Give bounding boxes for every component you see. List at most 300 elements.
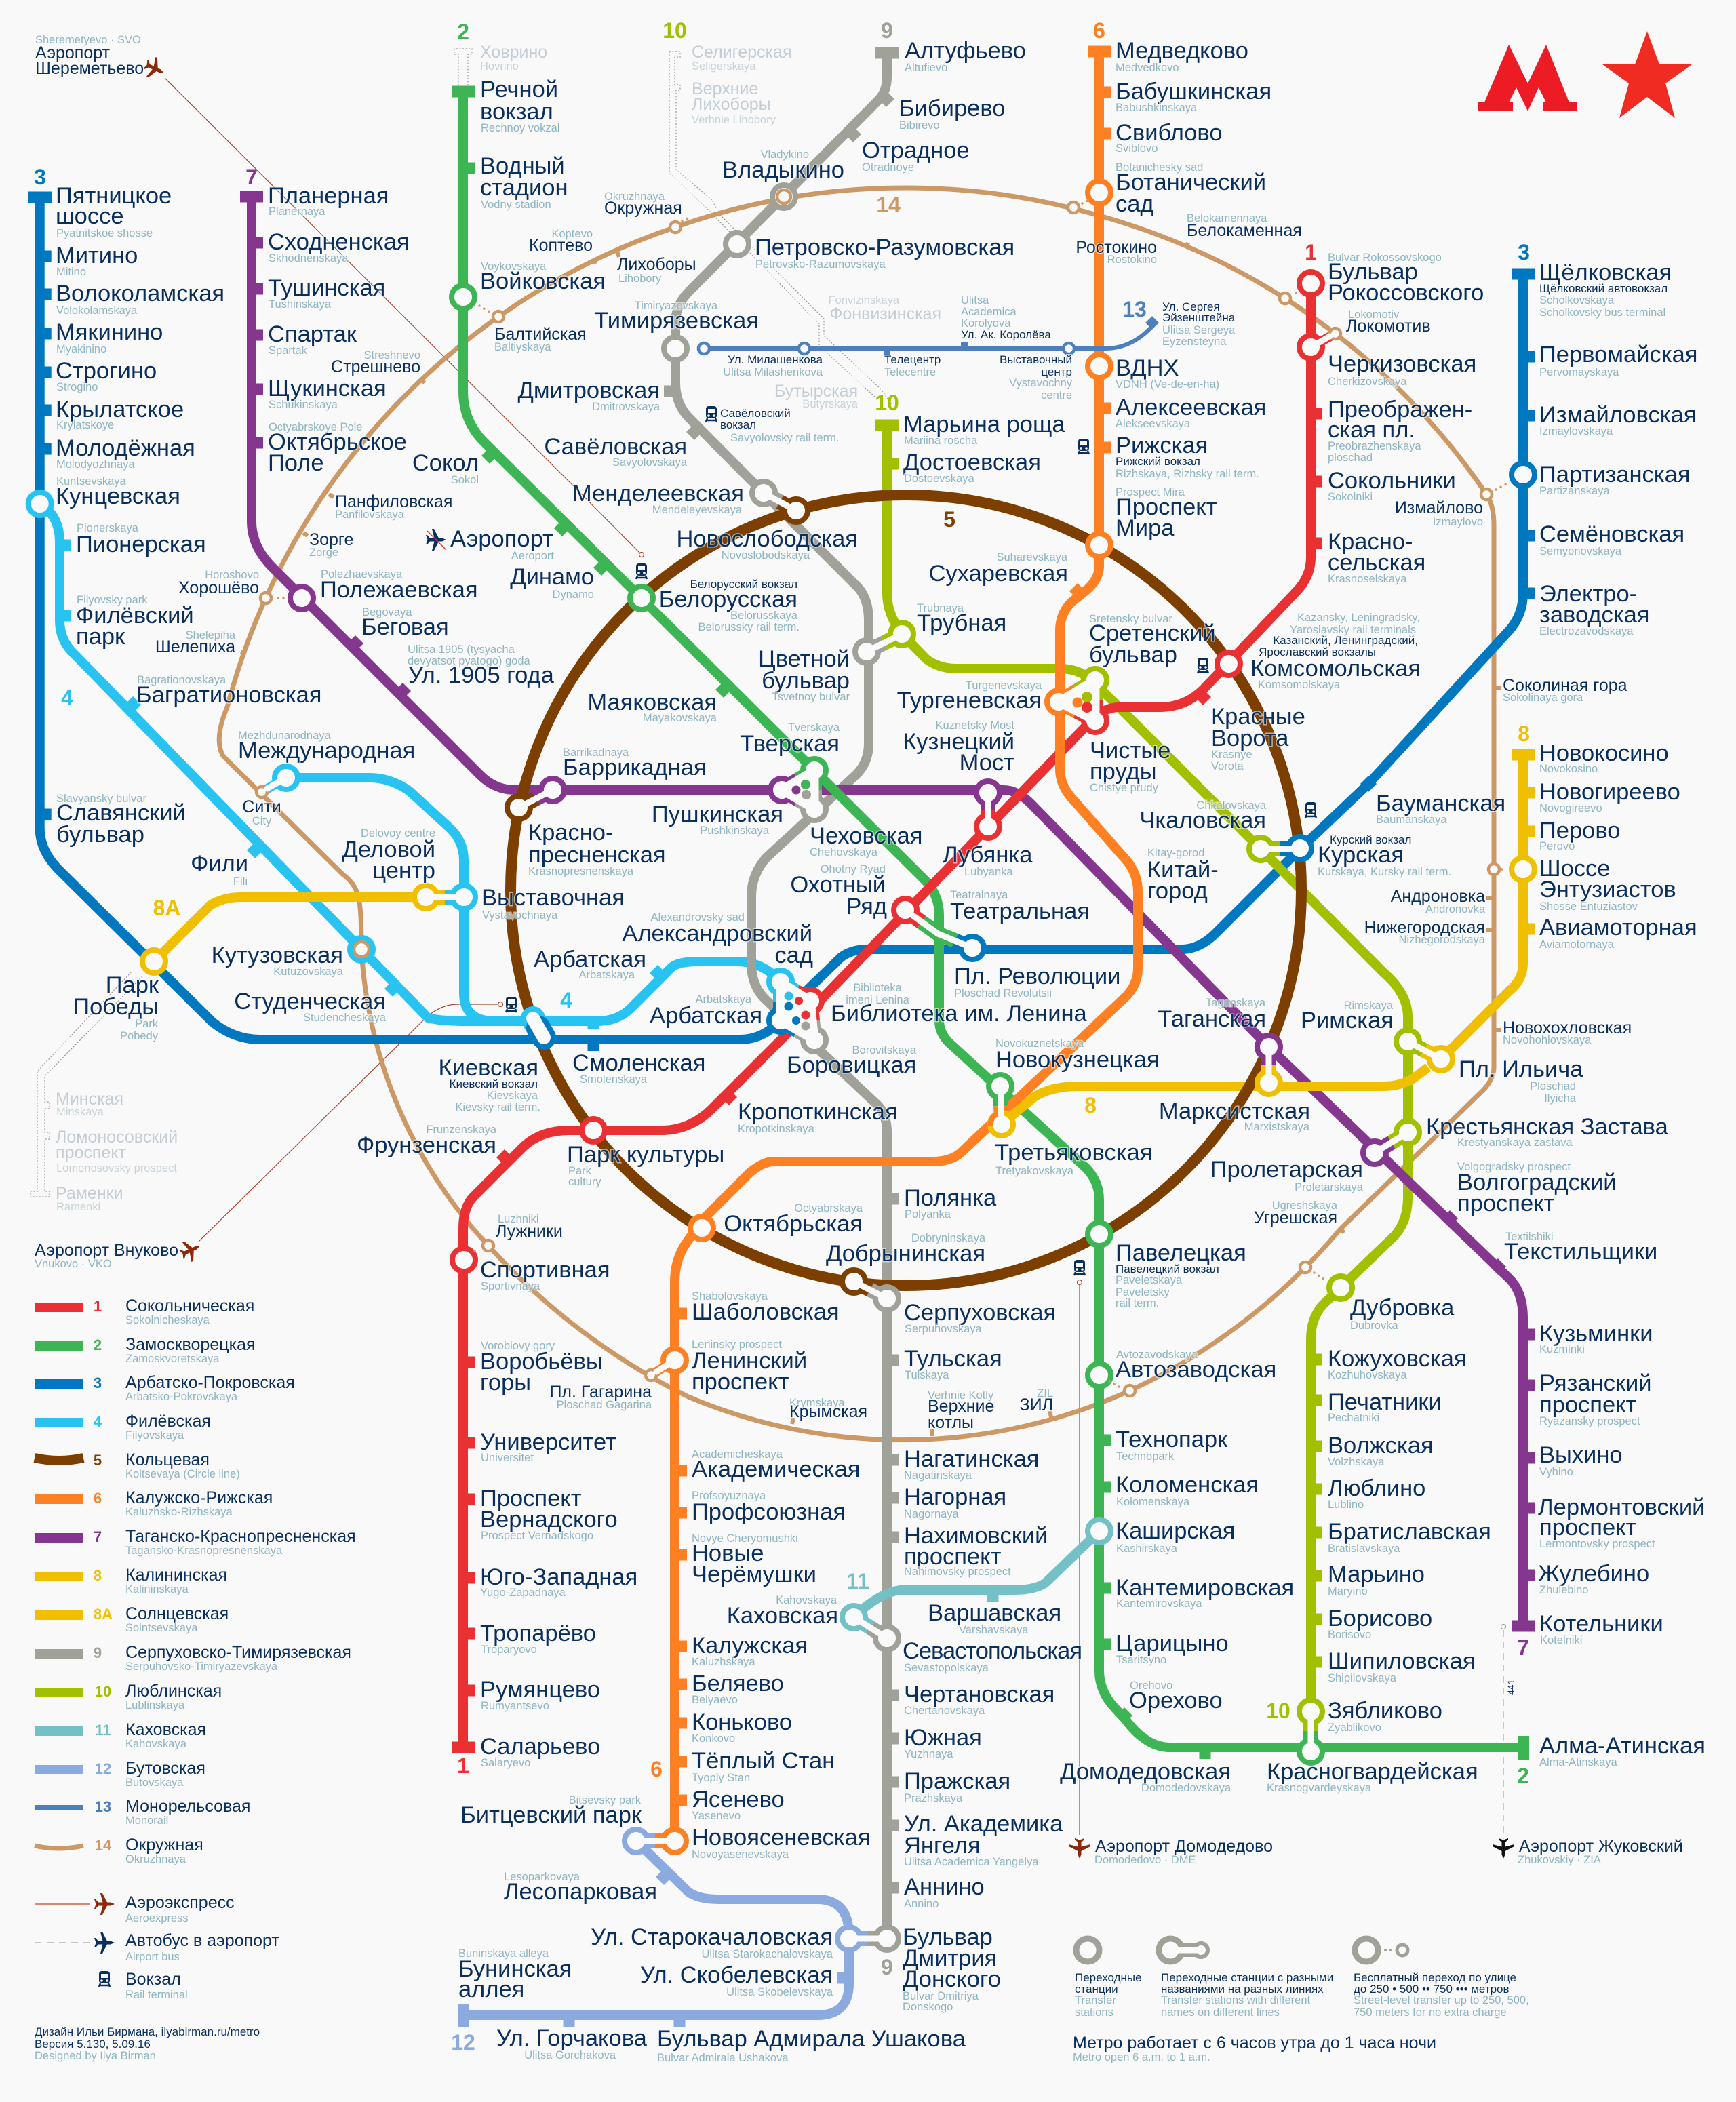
rail terminals: Kazansky etc: Казанский, Ленинградский, [1273,634,1418,647]
station: Krasnopresnenskaya: Krasnopresnenskaya [528,865,634,877]
airport: Domodedovo [1094,1837,1273,1866]
legend: street-level transfer: до 250 • 500 •• 750 ••• метров [1354,1983,1510,1996]
legend: lines: Бутовская [125,1759,205,1778]
station: Mezhdunarodnaya: Mezhdunarodnaya [238,730,332,742]
station: Borovitskaya: Боровицкая [787,1052,916,1078]
station: Altufievo: Алтуфьево [905,38,1026,64]
planned stations: Minskaya: Минская [56,1090,123,1109]
station: Delovoy centre: Delovoy centre [361,827,435,839]
legend: rail terminal [99,1970,188,2001]
station: Novokosino: Novokosino [1539,763,1598,775]
station: Maryino: Марьино [1328,1562,1425,1587]
station: Shosse Entuziastov [1539,856,1676,913]
station: Studencheskaya: Studencheskaya [303,1012,387,1024]
station: Botanichesky sad: сад [1116,191,1154,217]
station: Tsvetnoy bulvar: бульвар [762,668,850,694]
station: Bulvar Admirala Ushakova: Bulvar Admirala Ushakova [657,2052,789,2064]
station: Butyrskaya: Бутырская [774,382,858,401]
icons: rail terminals [506,406,1316,1275]
rail terminals: Kazansky etc: Ярославский вокзалы [1259,646,1376,658]
legend: rail terminal: Rail terminal [125,1989,188,2001]
icon: Moscow Metro M logo [1478,45,1577,111]
station: Prospekt Vernadskogo: Вернадского [480,1507,618,1532]
legend: lines: Kahovskaya [125,1738,187,1750]
station: Planernaya: Planernaya [269,205,326,218]
station: Prospekt Vernadskogo: Проспект [480,1486,582,1511]
station: Leninsky prospect: Ленинский [692,1348,807,1374]
station: Bibirevo: Bibirevo [899,119,940,132]
station: Rizhskaya: Рижская [1116,433,1208,458]
station: Nahimovsky prospect: Nahimovsky prospect [904,1566,1011,1578]
station: Preobrazhenskaya ploschad: ploschad [1328,452,1373,464]
legend: airport bus: Airport bus [125,1951,180,1963]
station: Dostoevskaya: Dostoevskaya [904,473,974,485]
station: Kurskaya: Курская [1318,842,1404,868]
station: Chistye prudy: Чистые [1090,738,1170,764]
station: Filyovsky park: Filyovsky park [77,594,148,606]
station: Horoshovo [178,569,259,597]
line 8: Kalininskaya [1002,755,1535,1124]
station: Horoshovo: Horoshovo [205,569,259,581]
transfer: Tsvetnoy–Trubnaya [855,622,913,663]
station: Sportivnaya: Спортивная [480,1257,610,1283]
station: Komsomolskaya: Komsomolskaya [1258,679,1341,691]
station: Perovo: Перово [1539,818,1621,844]
station: Zorge [309,530,353,559]
station: Octyabrskaya: Октябрьская [724,1211,863,1237]
airport: Vnukovo: Vnukovo · VKO [35,1258,112,1270]
station: Ohotny Ryad: Охотный [790,872,886,898]
transfer: Dobryninskaya–Serpukhovskaya [842,1270,899,1310]
credits [35,2025,260,2062]
station: Bulvar Dmitriya Donskogo: Bulvar Dmitriya [903,1990,979,2002]
line numbers: 3 [1518,240,1530,264]
station: Komsomolskaya: Комсомольская [1250,656,1421,681]
station: Buninskaya alleya [458,1947,572,2002]
station: Sokol: Sokol [451,474,479,486]
transfer: Okhotny Ryad–Teatralnaya–Revolutsii [894,898,984,959]
station: Verhnie Lihobory: Verhnie Lihobory [692,114,776,126]
station: Bagrationovskaya: Багратионовская [136,682,321,708]
station: Savyolovskaya: Savyolovskaya [612,456,688,469]
station: Dynamo: Dynamo [553,589,594,601]
station: Troparyovo: Тропарёво [480,1621,596,1646]
station: Krasnoselskaya: Krasnoselskaya [1328,573,1407,585]
station: Rechnoy vokzal: Rechnoy vokzal [481,122,559,134]
station: Konkovo: Коньково [692,1709,792,1735]
legend: lines: 10 [95,1683,111,1700]
legend: lines: Сокольническая [125,1296,254,1315]
station: Belokamennaya: Belokamennaya [1187,212,1267,224]
station: Buninskaya alleya: Бунинская [458,1956,572,1982]
transfer: Kakhovskaya–Sevastopolskaya [842,1606,899,1650]
station: Alekseevskaya: Alekseevskaya [1116,418,1191,430]
station: Yasenevo: Ясенево [692,1787,785,1812]
bus line to Zhukovsky [1501,1625,1505,1839]
station: Bulvar Dmitriya Donskogo [903,1924,1001,2013]
station: Salaryevo: Salaryevo [481,1757,530,1769]
station: Delovoy centre: Деловой [342,837,435,862]
station: Verhnie Kotly: Verhnie Kotly [928,1389,994,1402]
station: Begovaya: Беговая [361,614,449,640]
legend: lines: 5 [94,1452,102,1469]
legend: street-level transfer: Street-level transfer up to 250, 500, [1354,1994,1529,2006]
rail terminal: Savyolovsky: вокзал [720,418,756,431]
station: Ulitsa 1905 goda: Ulitsa 1905 (tysyacha [408,643,515,656]
station: Barrikadnaya: Barrikadnaya [563,747,629,759]
station: Biblioteka imeni Lenina: imeni Lenina [846,994,910,1006]
station: Frunzenskaya: Фрунзенская [357,1132,496,1158]
note: operating hours [1073,2034,1436,2063]
station: Lermontovsky prospect: проспект [1539,1515,1637,1541]
station: Belyaevo: Беляево [692,1671,784,1697]
station: Cherkizovskaya: Черкизовская [1328,351,1476,377]
station: Kashirskaya: Каширская [1116,1518,1235,1544]
legend: lines: 4 [94,1413,102,1430]
station: ZIL: ZIL [1037,1387,1053,1400]
legend: lines: 1 [94,1298,102,1315]
station: Bitsevsky park: Bitsevsky park [569,1794,642,1806]
station: Dobryninskaya: Dobryninskaya [911,1232,986,1244]
station: Luzhniki [496,1213,563,1241]
station: Bulvar Dmitriya Donskogo: Donskogo [903,2001,953,2013]
station: Preobrazhenskaya ploschad: Преображен- [1328,397,1472,422]
legend: lines: Solntsevskaya [125,1622,198,1634]
station: Novoslobodskaya: Novoslobodskaya [722,549,810,561]
legend: lines: 9 [94,1644,102,1661]
station: Tretyakovskaya: Третьяковская [995,1140,1152,1166]
station: Bitsevsky park: Битцевский парк [460,1802,642,1828]
station: Kuzminki: Кузьминки [1539,1321,1653,1347]
station: Lesoparkovaya: Lesoparkovaya [504,1871,580,1883]
legend: lines: Zamoskvoretskaya [125,1353,220,1365]
station: Teatralnaya: Teatralnaya [950,889,1008,901]
station: Lubyanka: Lubyanka [964,866,1013,878]
station: Novohohlovskaya: Novohohlovskaya [1503,1034,1592,1046]
station: Tverskaya: Tverskaya [788,721,840,734]
line numbers: 2 [1517,1764,1529,1788]
station: Krestyanskaya Zastava: Крестьянская Застава [1426,1114,1669,1140]
line numbers: 6 [1093,18,1105,43]
station: Planernaya: Планерная [268,183,389,209]
station: Horoshovo: Хорошёво [178,578,259,597]
station: Alexandrovsky sad: Alexandrovsky sad [651,911,745,924]
line 6: Kaluzhsko-Rizhskaya [675,52,1138,1841]
station: Novye Cheryomushki: Черёмушки [692,1562,816,1587]
line numbers: 11 [846,1569,869,1593]
legend: lines: Kalininskaya [125,1583,189,1595]
station: Kievskaya: Киевский вокзал [450,1077,538,1090]
station: Nagatinskaya: Нагатинская [904,1446,1039,1472]
station: Belorusskaya: Belorussky rail term. [698,621,800,633]
airport: Zhukovsky [1518,1837,1683,1866]
icon: plane Vnukovo [177,1236,204,1265]
station: Vystavochnaya: Vystavochnaya [482,909,558,921]
station: Krymskaya: Крымская [789,1402,867,1421]
station: Vorobiovy gory: Vorobiovy gory [481,1340,555,1352]
station: Borovitskaya: Borovitskaya [852,1044,917,1056]
station: Sokolinaya gora [1503,676,1628,704]
station: Shabolovskaya: Shabolovskaya [692,1290,768,1303]
station: Kantemirovskaya: Кантемировская [1116,1575,1294,1601]
station: Vyhino: Vyhino [1539,1466,1573,1478]
line numbers: 8A [153,896,180,920]
station: Ploschad Gagarina: Пл. Гагарина [549,1383,652,1402]
station: Textilshiki: Текстильщики [1504,1239,1657,1265]
station: Ulitsa Academica Yangelya: Янгеля [904,1833,981,1859]
airport: Zhukovsky: Аэропорт Жуковский [1519,1837,1683,1856]
station: Petrovsko-Razumovskaya: Petrovsko-Razumovskaya [755,258,886,271]
station: Slavyansky bulvar [56,793,186,848]
station: Sevastopolskaya: Севастопольская [903,1638,1082,1664]
station: Cherkizovskaya: Cherkizovskaya [1328,376,1407,388]
station: Mayakovskaya: Mayakovskaya [643,712,717,724]
station: Kropotkinskaya: Кропоткинская [738,1099,898,1125]
legend: lines: Sokolnicheskaya [125,1314,210,1326]
station: Koptevo: Koptevo [551,228,593,240]
transfer: Taganskaya–Marksistskaya [1257,1035,1280,1094]
airport: Sheremetyevo: Аэропорт [35,43,111,62]
station: Prospekt Mira [1116,486,1217,541]
legend: lines: Монорельсовая [125,1797,250,1816]
station: Bibirevo: Бибирево [899,96,1005,121]
station: Shosse Entuziastov: Shosse Entuziastov [1539,900,1638,913]
station: Volokolamskaya: Волоколамская [56,281,224,306]
line 1: Sokolnicheskaya [452,283,1322,1747]
station: Delovoy centre: центр [372,858,435,884]
airport: Domodedovo: Domodedovo · DME [1094,1854,1196,1866]
station: Volgogradsky prospect: Волгоградский [1457,1170,1617,1195]
station: Izmaylovo: Измайлово [1395,498,1483,517]
station: Novogireevo: Новогиреево [1539,779,1680,805]
station: Ohotny Ryad: Ohotny Ryad [821,863,886,875]
station: Rizhskaya: Rizhskaya, Rizhsky rail term. [1116,468,1259,480]
station: Ulitsa Akademika Korolyova: Ул. Ак. Королёва [961,328,1051,341]
station: Turgenevskaya: Тургеневская [897,688,1042,713]
station: Chistye prudy: пруды [1090,759,1157,785]
airport express lines [165,78,1082,1835]
station: Kozhuhovskaya: Кожуховская [1328,1346,1467,1372]
station: Park Pobedy: Парк [106,972,159,998]
station: Krylatskoye: Krylatskoye [56,419,114,431]
transfer: Turgenevskaya–Sretensky–Chistye prudy [1047,669,1107,732]
transfer: Starokachalovskaya–Dmitriya Donskogo [837,1927,899,1950]
station: Vodny stadion [480,153,568,211]
station: Ulitsa Akademika Korolyova: Korolyova [961,317,1011,330]
station: Filyovsky park: парк [76,624,125,650]
legend: lines: 11 [95,1722,111,1739]
station: Novokuznetskaya: Новокузнецкая [995,1047,1160,1073]
line 5: Koltsevaya ring [511,495,1301,1286]
line 11: Kakhovskaya [854,1531,1099,1617]
legend: transfer stations [1075,1939,1142,2019]
station: Ploschad Ilyicha: Пл. Ильича [1459,1056,1583,1082]
legend: street-level transfer: Бесплатный переход по улице [1354,1971,1516,1984]
station: Rechnoy vokzal: вокзал [480,99,553,125]
station: Lokomotiv: Локомотив [1346,317,1431,336]
legend: aeroexpress [35,1893,235,1924]
station: Mendeleyevskaya: Менделеевская [572,481,744,507]
station: Kolomenskaya: Коломенская [1116,1472,1259,1498]
station: Kantemirovskaya: Kantemirovskaya [1116,1598,1202,1610]
legend: aeroexpress: Aeroexpress [125,1912,189,1924]
station: Alekseevskaya: Алексеевская [1116,395,1266,420]
station: Krasnye Vorota: Vorota [1211,760,1244,772]
station: Ulitsa Milashenkova [723,353,823,378]
legend: transfer stations: Transfer [1075,1994,1116,2006]
station: Vladykino: Vladykino [760,148,809,161]
station: Mendeleyevskaya: Mendeleyevskaya [652,504,743,516]
station: Yuzhnaya: Yuzhnaya [904,1748,953,1760]
station: Lesoparkovaya: Лесопарковая [504,1879,657,1905]
station: Kolomenskaya: Kolomenskaya [1116,1496,1190,1508]
station: Tsaritsyno: Царицыно [1116,1631,1229,1657]
station: Kievskaya [439,1055,540,1113]
station: Belokamennaya [1187,212,1302,240]
station: Schelkovskaya: Scholkovsky bus terminal [1539,306,1665,319]
station: Krasnye Vorota: Krasnye [1211,749,1252,761]
station: Ulitsa Akademika Korolyova: Ulitsa [961,294,989,306]
station: Nizhegorodskaya [1364,918,1486,946]
station: Kuznetsky Most: Кузнецкий [903,729,1014,755]
station: Panfilovskaya: Panfilovskaya [335,509,405,521]
station: Chkalovskaya: Чкаловская [1139,808,1266,833]
Okruzhnaya small stations and street-transfer dots [260,201,1509,1396]
station: Krasnye Vorota: Ворота [1211,726,1289,751]
station: Perovo: Perovo [1539,840,1575,852]
station: Kievskaya: Kievsky rail term. [455,1101,540,1113]
legend: transfer stations with different names: Transfer stations with different [1161,1994,1311,2006]
station: Bulvar Dmitriya Donskogo: Дмитрия [903,1945,997,1971]
line numbers: 8 [1518,721,1530,746]
station: Vodny stadion: Водный [480,153,565,179]
station: Bulvar Dmitriya Donskogo: Донского [903,1966,1001,1992]
station: Preobrazhenskaya ploschad: ская пл. [1328,417,1415,443]
station: Chertanovskaya: Чертановская [904,1682,1054,1707]
station: Proletarskaya: Proletarskaya [1295,1181,1364,1193]
legend: lines: Филёвская [125,1412,211,1431]
station: VDNH: ВДНХ [1116,355,1179,381]
station: Ulitsa Academica Yangelya: Ул. Академика [904,1811,1063,1837]
station: Textilshiki: Textilshiki [1505,1231,1554,1243]
station: Panfilovskaya [335,492,452,521]
station: Tsaritsyno: Tsaritsyno [1116,1654,1166,1666]
airport: Domodedovo: Аэропорт Домодедово [1095,1837,1273,1856]
station: Avtozavodskaya: Автозаводская [1116,1357,1276,1383]
station: Park kultury: cultury [568,1176,601,1188]
station: Tulskaya: Тульская [904,1346,1002,1372]
station: Bulvar Admirala Ushakova [657,2026,966,2064]
station: Volgogradsky prospect: проспект [1457,1191,1555,1216]
station: Nagornaya: Нагорная [904,1484,1006,1510]
station: Pyatnitskoe shosse [56,183,172,239]
station: Maryino: Maryino [1328,1585,1368,1598]
station: Ulitsa Sergeya Eyzenshteyna [1162,300,1236,348]
station: Butyrskaya: Butyrskaya [802,398,859,410]
station: Maryina roscha: Марьина роща [903,412,1065,437]
station: Fonvizinskaya: Фонвизинская [829,304,941,323]
station: Filyovsky park: Филёвский [76,603,194,629]
station: Seligerskaya [692,43,792,73]
station: Sokolinaya gora: Sokolinaya gora [1503,692,1583,704]
station: Prospekt Vernadskogo [480,1486,618,1542]
legend: lines: Koltsevaya (Circle line) [125,1468,240,1480]
station: Octyabrskaya: Octyabrskaya [794,1202,863,1214]
station: Prazhskaya: Prazhskaya [904,1792,963,1804]
station: Schelkovskaya: Щёлковский автовокзал [1539,282,1668,295]
station: Oktyabrskoye Pole: Octyabrskoye Pole [269,421,362,433]
line numbers: 1 [457,1753,469,1778]
station: Sportivnaya: Sportivnaya [481,1280,540,1292]
station: Otradnoye: Отрадное [862,138,970,163]
station: Taganskaya: Таганская [1158,1006,1266,1032]
line numbers: 3 [34,165,46,189]
legend: aeroexpress: Аэроэкспресс [125,1893,235,1912]
station: Buninskaya alleya: Buninskaya alleya [458,1947,549,1960]
station: Kuzminki: Kuzminki [1539,1343,1585,1355]
station: Domodedovskaya: Domodedovskaya [1141,1782,1231,1794]
station: Krasnopresnenskaya: пресненская [528,842,666,868]
station: Lublino: Люблино [1328,1475,1425,1501]
airport: Sheremetyevo [35,34,144,78]
station: Ulitsa Sergeya Eyzenshteyna: Ул. Сергея [1162,300,1220,313]
station: City [242,797,281,827]
station: Izmaylovo: Izmaylovo [1433,516,1483,528]
station: Luzhniki: Лужники [496,1222,563,1241]
station: Shelepiha: Shelepiha [186,629,236,641]
line numbers: 7 [1517,1635,1529,1660]
legend: lines: Арбатско-Покровская [125,1373,295,1392]
station: Slavyansky bulvar: Slavyansky bulvar [56,793,146,805]
station: Kievskaya: Kievskaya [487,1090,538,1102]
transfer stations: single rings [28,181,1535,1543]
station: Alma-Atinskaya: Алма-Атинская [1539,1733,1705,1759]
legend: lines: 12 [95,1760,111,1777]
station: Ulitsa Akademika Korolyova: Academica [961,306,1017,318]
station: Borisovo: Борисово [1328,1606,1432,1631]
station: Ulitsa Gorchakova: Ул. Горчакова [496,2025,648,2051]
station: Kitay-gorod: Китай- [1147,857,1219,883]
legend: lines: Окружная [125,1836,203,1855]
station: Okruzhnaya: Okruzhnaya [604,191,665,203]
station: Aviamotornaya: Авиамоторная [1539,915,1697,940]
station: Andronovka: Andronovka [1425,903,1486,915]
legend: lines: Kaluzhsko-Rizhskaya [125,1506,233,1518]
station: Ploschad Ilyicha: Ilyicha [1544,1092,1577,1105]
station: Salaryevo: Саларьево [480,1734,600,1760]
station: Park kultury [567,1142,724,1188]
station: Lihobory [617,255,696,285]
station: Tyoply Stan: Tyoply Stan [692,1772,750,1784]
station: Ulitsa Skobelevskaya: Ул. Скобелевская [640,1962,833,1988]
station: Krasnogvardeyskaya: Krasnogvardeyskaya [1267,1782,1372,1794]
station: Kropotkinskaya: Kropotkinskaya [738,1123,815,1135]
station: Luzhniki: Luzhniki [498,1213,539,1225]
station: Volgogradsky prospect [1457,1161,1617,1216]
station: Sokolinaya gora: Соколиная гора [1503,676,1628,695]
station: Shelepiha: Шелепиха [155,637,235,656]
line 10: Lyublinskaya [875,425,1408,1747]
station: Chkalovskaya: Chkalovskaya [1196,799,1267,812]
station: Pyatnitskoe shosse: шоссе [56,203,124,229]
station: Kuntsevskaya: Kuntsevskaya [56,475,127,488]
station: Krymskaya: Krymskaya [789,1397,845,1409]
station: Arbatskaya (line 3): Arbatskaya [695,993,752,1006]
station: Semyonovskaya: Семёновская [1539,521,1684,547]
station: Rimskaya: Римская [1301,1008,1394,1033]
station: Novye Cheryomushki: Новые [692,1541,764,1566]
station: Marxistskaya: Марксистская [1159,1098,1310,1124]
